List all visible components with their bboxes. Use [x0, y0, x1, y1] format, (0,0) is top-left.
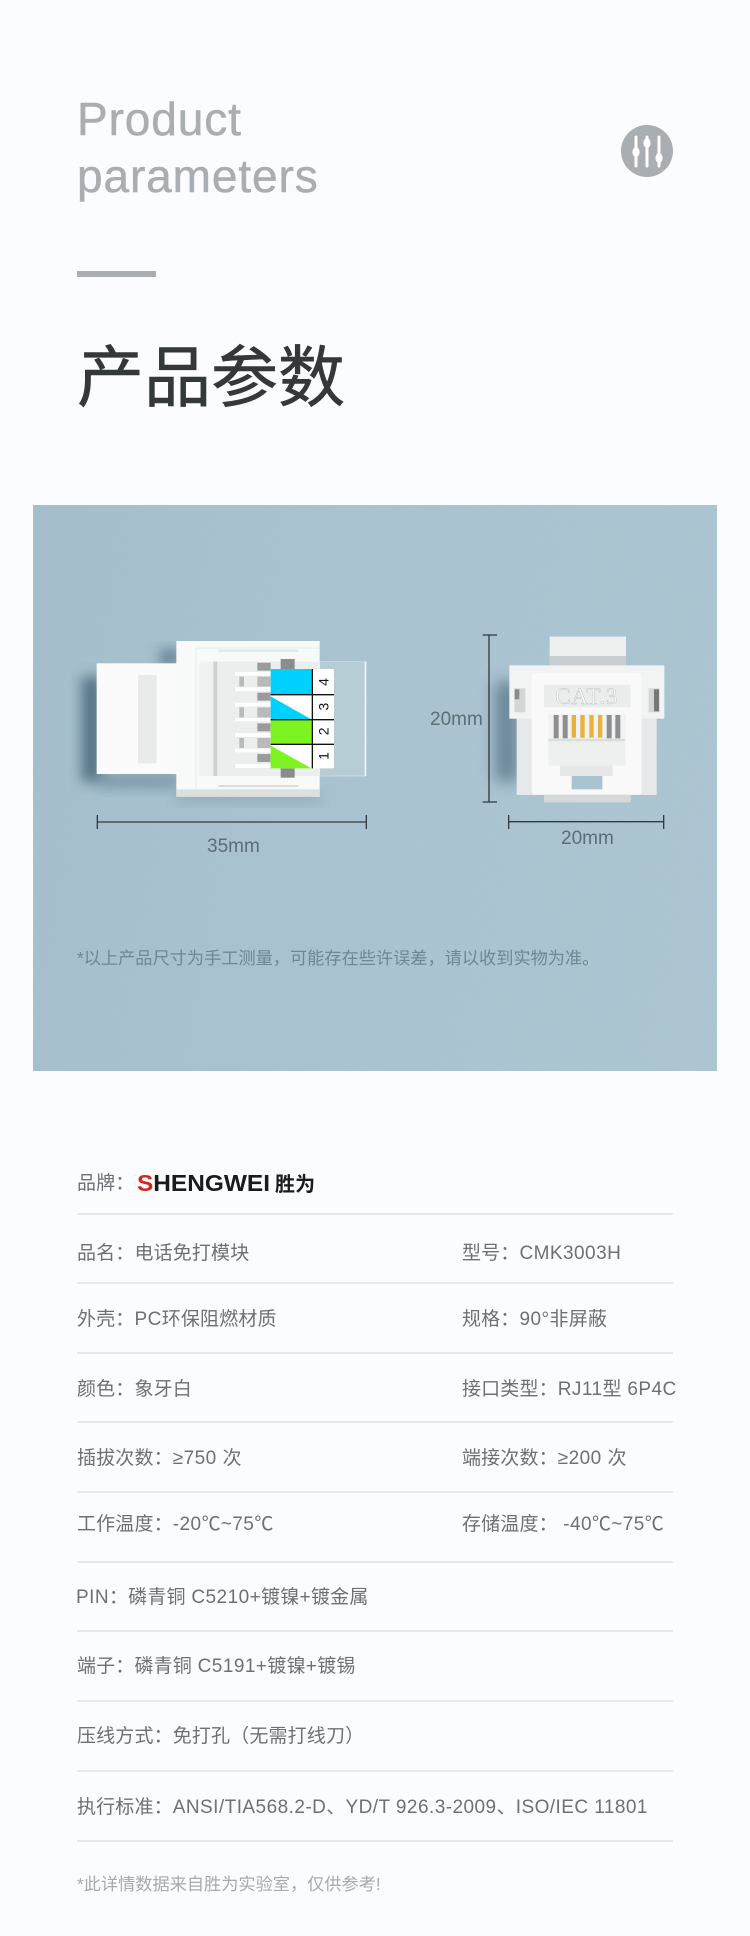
- label: 35mm: 35mm: [207, 836, 260, 857]
- footnote: *此详情数据来自胜为实验室，仅供参考!: [77, 1874, 381, 1894]
- chinese heading: 产品参数: [77, 341, 345, 416]
- spec: operating temperature: 工作温度：-20℃~75℃: [77, 1514, 273, 1535]
- spec: interface type: 接口类型：RJ11型 6P4C: [462, 1379, 677, 1400]
- spec: product name: 品名：电话免打模块: [77, 1243, 249, 1264]
- colour label: [271, 669, 334, 768]
- panel: product dimensions: [33, 505, 717, 1071]
- spec: insertion cycles: 插拔次数：≥750 次: [77, 1448, 242, 1469]
- icon: sliders: [621, 125, 673, 177]
- english title: Product: [77, 93, 242, 145]
- dimension note: *以上产品尺寸为手工测量，可能存在些许误差，请以收到实物为准。: [77, 948, 599, 968]
- colour label: 2: [315, 727, 331, 735]
- colour label: 1: [315, 752, 331, 760]
- label: 20mm height: 20mm: [430, 709, 483, 730]
- right product diagram: [482, 634, 664, 829]
- spec: PIN: PIN：磷青铜 C5210+镀镍+镀金属: [76, 1587, 368, 1608]
- spec: execution standard: 执行标准：ANSI/TIA568.2-D、YD/T 926.3-2009、ISO/IEC 11801: [77, 1797, 648, 1818]
- dimension line 35mm: [97, 815, 366, 829]
- spec: colour: 颜色：象牙白: [77, 1379, 192, 1400]
- colour label: 3: [315, 703, 331, 711]
- english title: parameters: [77, 150, 319, 202]
- panel texture: [33, 505, 717, 1071]
- spec: standard: 规格：90°非屏蔽: [462, 1309, 607, 1330]
- spec: housing: 外壳：PC环保阻燃材质: [77, 1309, 277, 1330]
- colour label: 4: [315, 678, 331, 686]
- spec: termination cycles: 端接次数：≥200 次: [462, 1448, 627, 1469]
- CAT.3 embossed text: CAT.3: [555, 684, 618, 710]
- spec: brand: 品牌：: [77, 1173, 134, 1194]
- english title: [77, 93, 319, 202]
- dimension lines 20mm: [483, 635, 664, 829]
- spec: crimp method: 压线方式：免打孔（无需打线刀）: [77, 1726, 364, 1747]
- spec: model: 型号：CMK3003H: [462, 1243, 621, 1264]
- spec: brand: [77, 1173, 315, 1194]
- accent bar: [77, 271, 156, 277]
- label: 20mm width: 20mm: [561, 828, 614, 849]
- left product diagram: [73, 641, 367, 829]
- spec: terminal: 端子：磷青铜 C5191+镀镍+镀锡: [77, 1656, 356, 1677]
- spec: storage temperature: 存储温度： -40℃~75℃: [462, 1514, 664, 1535]
